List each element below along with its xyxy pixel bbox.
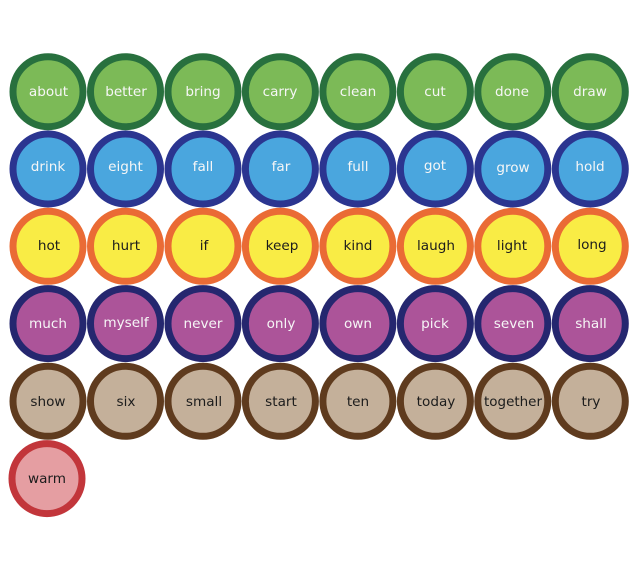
circle: hold: hold <box>575 159 605 175</box>
circle: got: got <box>424 158 446 174</box>
circle: full: full <box>348 159 368 175</box>
circle: grow <box>478 134 548 204</box>
circle: fall <box>168 134 238 204</box>
circle: laugh <box>400 211 470 281</box>
circle: hot: hot <box>38 238 60 254</box>
circle: bring: bring <box>185 84 221 100</box>
circle: done: done <box>495 84 529 100</box>
circle: draw <box>555 57 625 127</box>
circle: together <box>478 366 548 436</box>
circle: hurt: hurt <box>112 238 140 254</box>
circle: kind: kind <box>344 238 372 254</box>
circle: ten: ten <box>347 394 369 410</box>
circle: small <box>168 366 238 436</box>
row 1: green circles <box>13 57 625 127</box>
circle: laugh: laugh <box>417 238 455 254</box>
circle: start <box>245 366 315 436</box>
circle: try: try <box>582 394 600 410</box>
circle: long <box>555 211 625 281</box>
circle: shall <box>555 289 625 359</box>
circle: much: much <box>29 316 67 332</box>
circle: today <box>400 366 470 436</box>
circle: clean: clean <box>340 84 376 100</box>
circle: done <box>478 57 548 127</box>
circle: drink: drink <box>31 159 65 175</box>
circle: light <box>478 211 548 281</box>
circle: cut <box>400 57 470 127</box>
row 2: blue circles <box>13 134 625 204</box>
circle: kind <box>323 211 393 281</box>
circle: fall: fall <box>193 159 213 175</box>
circle: cut: cut <box>424 84 446 100</box>
circle: about: about <box>29 84 68 100</box>
circle: small: small <box>186 394 222 410</box>
circle: about <box>13 57 83 127</box>
circle: if <box>168 211 238 281</box>
circle: full <box>323 134 393 204</box>
row 4: purple circles <box>13 289 625 359</box>
row 5: tan circles <box>13 366 625 436</box>
circle: pick <box>400 289 470 359</box>
circle: grow: grow <box>496 160 530 176</box>
circle: hurt <box>90 211 160 281</box>
circle: hold <box>555 134 625 204</box>
circle: eight <box>90 134 160 204</box>
circle: never <box>168 289 238 359</box>
circle: ten <box>323 366 393 436</box>
circle: eight: eight <box>108 159 143 175</box>
circle: carry <box>245 57 315 127</box>
circle: only <box>245 289 315 359</box>
circle: show: show <box>30 394 66 410</box>
circle: shall: shall <box>575 316 607 332</box>
circle: warm: warm <box>28 471 66 487</box>
circle: if: if <box>200 238 209 254</box>
circle: drink <box>13 134 83 204</box>
circle: light: light <box>497 238 527 254</box>
circle: better <box>90 57 160 127</box>
circle: together: together <box>484 394 542 410</box>
circle: much <box>13 289 83 359</box>
circle: myself <box>90 289 160 359</box>
circle: never: never <box>184 316 223 332</box>
circle: keep: keep <box>266 238 298 254</box>
circle: myself: myself <box>103 315 150 331</box>
circle: hot <box>13 211 83 281</box>
circle: clean <box>323 57 393 127</box>
row 3: yellow circles <box>13 211 625 281</box>
circle: got <box>400 134 470 204</box>
circle: only: only <box>267 316 295 332</box>
circle: seven: seven <box>494 316 534 332</box>
row 6: red circle <box>12 444 82 514</box>
circle: keep <box>245 211 315 281</box>
circle: own: own <box>344 316 372 332</box>
circle: carry: carry <box>263 84 297 100</box>
circle: six: six <box>117 394 135 410</box>
circle: bring <box>168 57 238 127</box>
circle: pick: pick <box>421 316 449 332</box>
circle: better: better <box>105 84 147 100</box>
circle: far <box>245 134 315 204</box>
circle: try <box>555 366 625 436</box>
circle: draw: draw <box>573 84 607 100</box>
circle: long: long <box>577 237 607 253</box>
circle: own <box>323 289 393 359</box>
circle: show <box>13 366 83 436</box>
circle: today: today <box>417 394 455 410</box>
circle: six <box>90 366 160 436</box>
circle: seven <box>478 289 548 359</box>
circle: far: far <box>272 159 291 175</box>
circle: start: start <box>265 394 297 410</box>
